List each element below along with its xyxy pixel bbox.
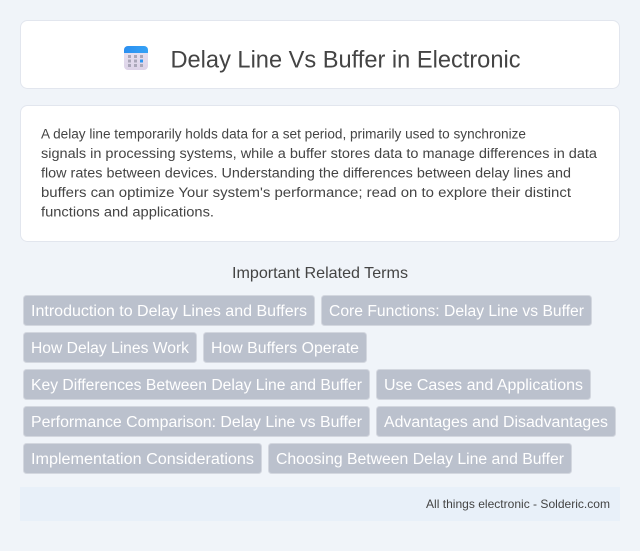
tag: implementation: Implementation Considerations	[31, 451, 254, 468]
tag: key differences	[24, 370, 370, 400]
tag: core functions: Core Functions: Delay Line vs Buffer	[329, 303, 584, 320]
tag: advantages	[376, 406, 616, 436]
tag: choosing: Choosing Between Delay Line and Buffer	[276, 451, 564, 468]
header panel	[20, 20, 620, 88]
text block: introduction paragraph: buffers can optimize Your system's performance; read on to explore their distinct	[41, 185, 571, 201]
icon: calendar	[124, 46, 148, 70]
tag: key differences: Key Differences Between Delay Line and Buffer	[31, 377, 362, 394]
tag: introduction	[24, 296, 314, 326]
tag: performance comparison	[24, 406, 370, 436]
tag: implementation	[24, 444, 262, 474]
text block: introduction paragraph: A delay line temporarily holds data for a set period, primarily used to synchronize	[41, 126, 526, 142]
tag list	[24, 296, 616, 474]
text block: introduction paragraph: signals in processing systems, while a buffer stores data to manage differences in data	[41, 146, 597, 162]
tag: how buffers operate: How Buffers Operate	[211, 340, 359, 357]
tag: how delay lines work: How Delay Lines Work	[31, 340, 189, 357]
footer: All things electronic - Solderic.com	[426, 497, 610, 511]
tag: use cases: Use Cases and Applications	[384, 377, 583, 394]
title: Delay Line Vs Buffer in Electronic	[170, 46, 520, 74]
tag: how buffers operate	[204, 332, 366, 362]
tag: introduction: Introduction to Delay Lines and Buffers	[31, 303, 307, 320]
panel: introduction	[20, 106, 620, 242]
text block: introduction paragraph: functions and applications.	[41, 204, 214, 220]
tag: choosing	[268, 444, 572, 474]
tag: core functions	[322, 296, 592, 326]
tag: how delay lines work	[24, 332, 196, 362]
text block: introduction paragraph	[41, 126, 597, 220]
heading: important related terms: Important Related Terms	[232, 265, 408, 282]
tag: use cases	[376, 370, 590, 400]
tag: performance comparison: Performance Comparison: Delay Line vs Buffer	[31, 414, 362, 431]
tag: advantages: Advantages and Disadvantages	[384, 414, 608, 431]
footer	[20, 487, 620, 521]
text block: introduction paragraph: flow rates between devices. Understanding the differences between delay lines and	[41, 166, 571, 182]
